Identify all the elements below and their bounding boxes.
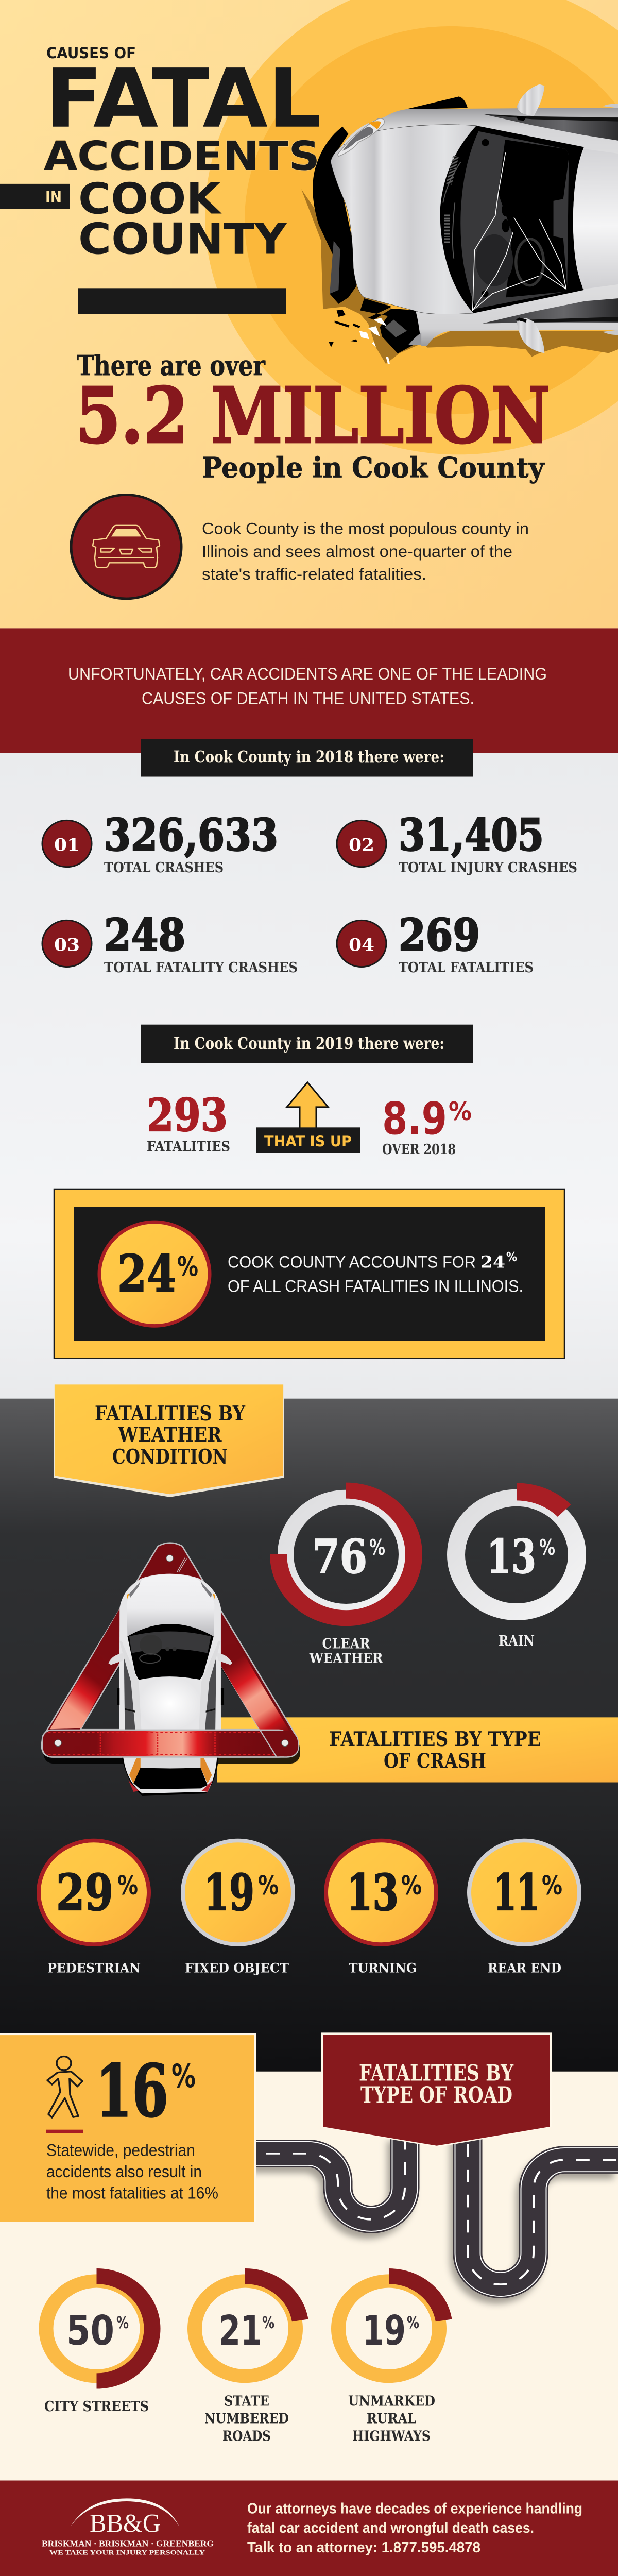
text: attorney contact: Our attorneys have decades of experience handling	[247, 2501, 582, 2517]
donut: 19 percent unmarked rural highways: %	[407, 2313, 419, 2332]
stat circle: turning 13 percent: 13	[347, 1864, 399, 1922]
population headline: There are over	[77, 349, 266, 382]
arrow: that is up	[256, 1082, 360, 1153]
population headline	[76, 349, 550, 484]
stat 02: total injury crashes: TOTAL INJURY CRASHES	[399, 859, 577, 876]
panel: pedestrian 16 percent: accidents also result in	[46, 2162, 202, 2181]
banner: fatalities by weather condition: CONDITION	[112, 1445, 228, 1469]
text: Cook County description: Cook County is the most populous county in	[202, 520, 529, 538]
stat circle: turning 13 percent: TURNING	[349, 1960, 417, 1976]
donut: 50 percent city streets: %	[116, 2313, 129, 2332]
text: attorney contact: Talk to an attorney: 1.877.595.4878	[247, 2540, 480, 2556]
stat circle: fixed object 19 percent	[183, 1841, 293, 1976]
banner: fatalities by weather condition	[54, 1384, 284, 1497]
stat circle: pedestrian 29 percent: %	[117, 1870, 138, 1901]
stat: 293 fatalities: 293	[147, 1089, 228, 1142]
stat: 293 fatalities: FATALITIES	[147, 1138, 230, 1155]
stat circle: fixed object 19 percent: FIXED OBJECT	[185, 1960, 289, 1976]
heading: 2019	[141, 1025, 473, 1063]
donut: 21 percent state numbered roads: NUMBERED	[204, 2410, 289, 2427]
panel: leading causes red banner	[0, 628, 618, 753]
donut: 76 percent clear weather: WEATHER	[309, 1650, 383, 1667]
panel: 2018 and 2019 statistics background	[0, 753, 618, 1399]
stat 01: total crashes	[42, 809, 278, 876]
icon: car in red circle	[71, 495, 181, 599]
donut: 50 percent city streets: 50	[66, 2307, 114, 2354]
donut: 76 percent clear weather: 76	[312, 1529, 367, 1584]
callout: 24 percent of crash fatalities: 24	[117, 1244, 176, 1303]
illustration: winding roads	[252, 2134, 618, 2291]
donut: 76 percent clear weather: %	[369, 1535, 385, 1561]
banner: fatalities by weather condition: WEATHER	[118, 1423, 222, 1447]
stat 01: total crashes: 326,633	[104, 809, 278, 861]
panel: pedestrian 16 percent: the most fatalities at 16%	[46, 2183, 218, 2202]
stat 04: total fatalities	[337, 909, 534, 976]
callout: 24 percent of crash fatalities: 24	[480, 1252, 505, 1272]
stat 04: total fatalities: 269	[399, 909, 480, 961]
text: Cook County description: Illinois and sees almost one-quarter of the	[202, 543, 512, 561]
panel: leading causes red banner: UNFORTUNATELY, CAR ACCIDENTS ARE ONE OF THE LEADING	[68, 665, 547, 683]
stat circle: rear end 11 percent: REAR END	[488, 1960, 561, 1976]
population headline: People in Cook County	[202, 451, 545, 484]
stat circle: turning 13 percent: %	[401, 1870, 422, 1901]
donut: 76 percent clear weather	[278, 1490, 414, 1667]
donut: 13 percent rain	[456, 1492, 577, 1649]
banner: fatalities by type of road: FATALITIES BY	[359, 2060, 514, 2086]
stat circle: fixed object 19 percent: 19	[204, 1864, 254, 1922]
title: COUNTY	[78, 215, 287, 264]
banner: fatalities by weather condition: FATALITIES BY	[95, 1401, 246, 1426]
icon: walking person	[47, 2057, 82, 2117]
stat: 8.9% over 2018: %	[449, 1097, 472, 1126]
logo: BB&G Briskman Briskman Greenberg: BB&G	[90, 2509, 161, 2538]
stat 01: total crashes: TOTAL CRASHES	[104, 859, 224, 876]
stat circle: fixed object 19 percent: %	[258, 1870, 279, 1901]
stat 01: total crashes: 01	[54, 835, 80, 855]
title	[0, 45, 321, 264]
donut: 21 percent state numbered roads: %	[262, 2313, 274, 2332]
stat 04: total fatalities: TOTAL FATALITIES	[399, 959, 534, 976]
illustration: warning triangle and white car	[42, 1543, 300, 1796]
stat 03: total fatality crashes	[42, 909, 298, 976]
panel: pedestrian 16 percent: %	[171, 2058, 196, 2095]
callout: 24 percent of crash fatalities: OF ALL CRASH FATALITIES IN ILLINOIS.	[228, 1277, 523, 1295]
banner: fatalities by type of crash: FATALITIES BY TYPE	[329, 1727, 541, 1751]
donut: 21 percent state numbered roads: 21	[219, 2307, 262, 2354]
car silhouette	[122, 1755, 219, 1796]
donut: 13 percent rain: RAIN	[499, 1633, 535, 1649]
panel: pedestrian 16 percent: 16	[96, 2048, 168, 2133]
logo: BB&G Briskman Briskman Greenberg	[42, 2498, 214, 2556]
stat circle: pedestrian 29 percent: PEDESTRIAN	[47, 1960, 141, 1976]
banner: fatalities by type of crash	[217, 1717, 618, 1783]
callout: 24 percent of crash fatalities: COOK COUNTY ACCOUNTS FOR	[228, 1252, 476, 1271]
donut: 21 percent state numbered roads	[195, 2276, 300, 2444]
stat: 8.9% over 2018: 8.9	[382, 1093, 447, 1145]
callout: 24 percent of crash fatalities	[54, 1189, 564, 1359]
donut: 19 percent unmarked rural highways	[338, 2276, 444, 2444]
stat circle: pedestrian 29 percent: 29	[56, 1864, 113, 1922]
stat circle: pedestrian 29 percent	[39, 1841, 149, 1976]
logo: BB&G Briskman Briskman Greenberg: BRISKMAN · BRISKMAN · GREENBERG	[42, 2538, 214, 2548]
panel: leading causes red banner: CAUSES OF DEATH IN THE UNITED STATES.	[142, 689, 474, 707]
banner: fatalities by type of road: TYPE OF ROAD	[360, 2081, 512, 2108]
donut: 21 percent state numbered roads: STATE	[224, 2393, 269, 2409]
donut: 19 percent unmarked rural highways: UNMARKED	[348, 2393, 435, 2409]
text: Cook County description	[202, 520, 529, 583]
stat 04: total fatalities: 04	[349, 935, 374, 955]
callout: 24 percent of crash fatalities: %	[177, 1251, 198, 1282]
panel: cream road section background	[0, 2072, 618, 2481]
heading: 2018: In Cook County in 2018 there were:	[174, 747, 444, 767]
heading: 2019: In Cook County in 2019 there were:	[174, 1033, 444, 1053]
donut: 13 percent rain: %	[539, 1535, 555, 1561]
text: attorney contact	[247, 2501, 582, 2556]
panel: pedestrian 16 percent	[0, 2033, 256, 2222]
title: ACCIDENTS	[44, 133, 320, 179]
donut: 13 percent rain: 13	[487, 1529, 536, 1584]
stat circle: turning 13 percent	[326, 1841, 436, 1976]
stat 03: total fatality crashes: TOTAL FATALITY CRASHES	[104, 959, 298, 976]
stat 03: total fatality crashes: 03	[54, 935, 80, 955]
stat circle: rear end 11 percent: 11	[493, 1864, 540, 1922]
stat circle: rear end 11 percent: %	[542, 1870, 562, 1901]
stat 02: total injury crashes: 31,405	[399, 809, 544, 861]
logo: BB&G Briskman Briskman Greenberg: WE TAKE YOUR INJURY PERSONALLY	[49, 2549, 205, 2556]
callout: 24 percent of crash fatalities: %	[506, 1250, 517, 1264]
arrow: that is up: THAT IS UP	[264, 1133, 352, 1150]
illustration: crashed silver car	[301, 84, 618, 364]
stat circle: rear end 11 percent	[469, 1841, 579, 1976]
title: FATAL	[45, 52, 321, 146]
stat 03: total fatality crashes: 248	[104, 909, 185, 961]
donut: 50 percent city streets	[44, 2276, 152, 2415]
donut: 76 percent clear weather: CLEAR	[322, 1635, 370, 1652]
panel: hero background	[0, 0, 618, 628]
donut: 50 percent city streets: CITY STREETS	[44, 2398, 149, 2415]
donut: 19 percent unmarked rural highways: 19	[363, 2307, 406, 2354]
donut: 19 percent unmarked rural highways: RURAL	[367, 2410, 416, 2427]
panel: footer	[0, 2481, 618, 2576]
panel: pedestrian 16 percent: Statewide, pedestrian	[46, 2141, 195, 2159]
rear of car	[123, 1757, 217, 1793]
donut: 21 percent state numbered roads: ROADS	[222, 2428, 271, 2444]
text: Cook County description: state's traffic-related fatalities.	[202, 565, 426, 583]
heading: 2018	[141, 739, 473, 777]
title: IN	[45, 189, 62, 206]
title: COOK	[78, 175, 222, 224]
stat: 293 fatalities	[147, 1089, 230, 1155]
text: attorney contact: fatal car accident and wrongful death cases.	[247, 2520, 534, 2536]
stat 02: total injury crashes: 02	[349, 835, 374, 855]
panel: dark road section background	[0, 1399, 618, 2078]
stat: 8.9% over 2018: OVER 2018	[382, 1141, 456, 1158]
reflector bar	[42, 1730, 288, 1757]
stat 02: total injury crashes	[337, 809, 577, 876]
title: CAUSES OF	[46, 45, 136, 62]
black title bar	[78, 288, 286, 314]
banner: fatalities by type of road	[321, 2032, 552, 2147]
donut: 19 percent unmarked rural highways: HIGHWAYS	[352, 2428, 431, 2444]
banner: fatalities by type of crash: OF CRASH	[384, 1749, 486, 1773]
